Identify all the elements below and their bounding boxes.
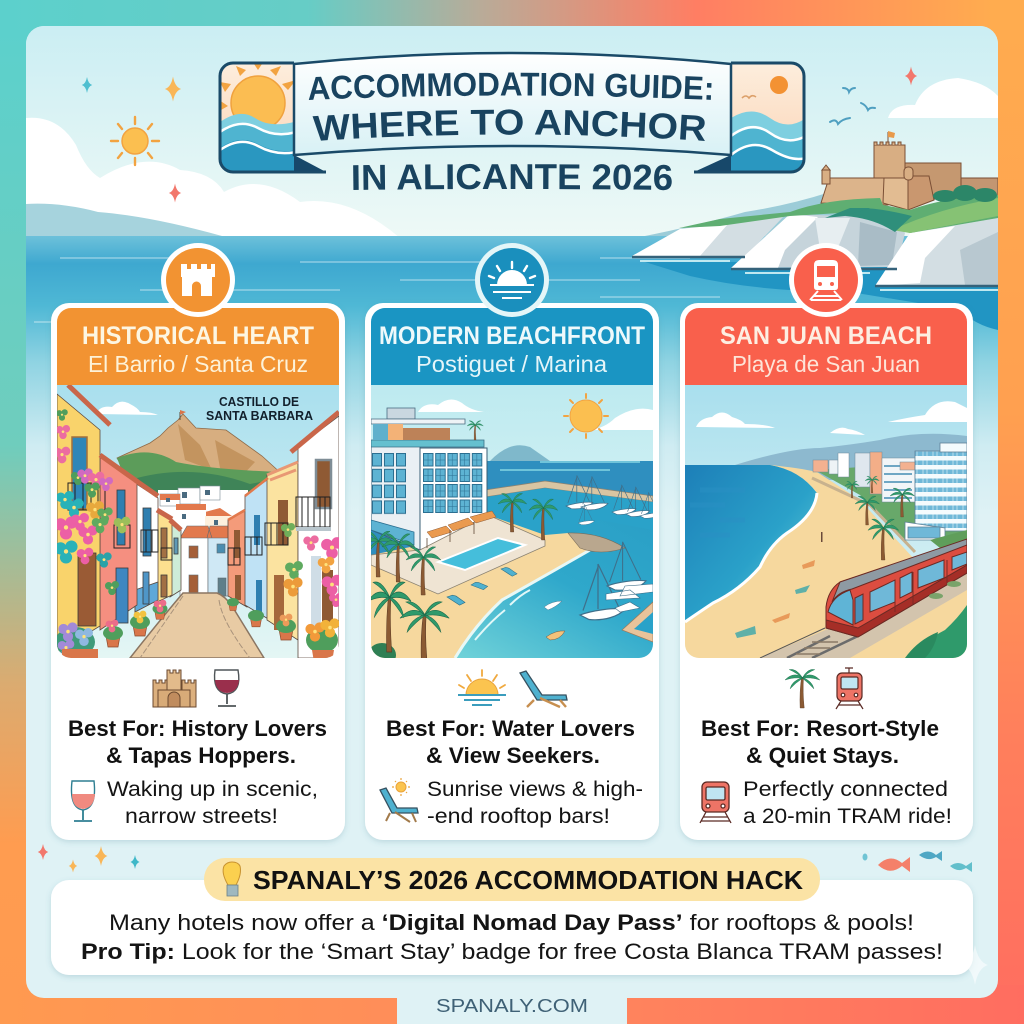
card 1 header: HISTORICAL HEART xyxy=(82,322,314,350)
card 1 illustration: old town street xyxy=(54,385,343,662)
hack text: Pro Tip: Look for the ‘Smart Stay’ badge for free Costa Blanca TRAM passes! xyxy=(81,939,943,964)
card 3 header: Playa de San Juan xyxy=(732,351,920,377)
title banner xyxy=(218,52,806,190)
card 3 header xyxy=(685,308,967,385)
banner right flap xyxy=(694,62,806,175)
moored boats back xyxy=(566,475,593,509)
card 1 body xyxy=(68,670,327,828)
towels xyxy=(772,560,815,623)
footer tab: SPANALY.COM xyxy=(436,996,588,1016)
hack heading pill xyxy=(204,858,820,901)
panel: historical heart card xyxy=(51,243,345,840)
clouds left xyxy=(26,118,400,238)
card 2 header xyxy=(371,308,653,385)
palms xyxy=(371,531,392,578)
panel: san juan beach card xyxy=(680,243,973,840)
card 2 illustration: hotel and marina xyxy=(362,385,661,667)
large hotel xyxy=(905,443,967,540)
right houses xyxy=(228,416,339,658)
icon badge: sunrise xyxy=(475,243,549,317)
best for text: Best For: Water Lovers xyxy=(386,716,635,741)
water and beach xyxy=(456,560,653,658)
icon: tram xyxy=(836,668,863,709)
tip text: a 20-min TRAM ride! xyxy=(743,805,952,828)
beach xyxy=(685,465,967,658)
terrace and pool xyxy=(371,515,545,594)
rock B xyxy=(731,214,905,268)
end-of-street houses xyxy=(180,526,229,596)
castle label: SANTA BARBARA xyxy=(206,409,313,423)
footer tab xyxy=(397,996,627,1024)
hack text: Many hotels now offer a ‘Digital Nomad Day Pass’ for rooftops & pools! xyxy=(109,910,914,935)
birds xyxy=(830,88,875,124)
card 1 header: El Barrio / Santa Cruz xyxy=(88,351,308,377)
hotel xyxy=(371,408,487,550)
tip text xyxy=(743,778,952,828)
foliage xyxy=(913,605,967,658)
best for text xyxy=(386,716,635,768)
tram xyxy=(826,539,967,637)
left doors, windows and balconies xyxy=(68,437,178,626)
hills xyxy=(735,434,967,480)
card 3 body xyxy=(700,668,952,828)
road xyxy=(130,593,264,658)
hack heading pill: SPANALY’S 2026 ACCOMMODATION HACK xyxy=(253,865,803,895)
beach loungers xyxy=(447,595,465,605)
cliffs with castle xyxy=(632,131,998,290)
right windows and balconies xyxy=(228,460,333,635)
hack text xyxy=(81,910,943,964)
clouds right xyxy=(888,78,998,118)
fish decoration xyxy=(862,851,972,872)
icon badge: train xyxy=(789,243,863,317)
left houses xyxy=(57,394,181,652)
panel: modern beachfront card xyxy=(362,243,661,840)
card 3 illustration: beach and tram xyxy=(685,385,967,658)
icon: sun lounger xyxy=(520,671,567,707)
icon: small tram xyxy=(700,782,731,823)
best for text: & Tapas Hoppers. xyxy=(106,743,296,768)
tip text: Perfectly connected xyxy=(743,778,948,801)
front sailboats and pier xyxy=(580,564,625,620)
rock A xyxy=(632,216,784,257)
tip text: narrow streets! xyxy=(125,805,278,828)
sun xyxy=(564,394,608,438)
card 2 header: MODERN BEACHFRONT xyxy=(379,322,645,350)
decorative sparkles lower left xyxy=(38,844,140,872)
palms xyxy=(845,481,859,498)
title line 3: IN ALICANTE 2026 xyxy=(353,164,672,190)
tram track xyxy=(760,570,967,658)
distant hills xyxy=(26,192,860,237)
flowers xyxy=(54,409,343,662)
icon: lounger with sun xyxy=(380,778,418,822)
banner left flap xyxy=(219,62,326,175)
castle label xyxy=(206,397,313,420)
icon: sand castle xyxy=(153,670,196,707)
faint sparkle xyxy=(962,945,988,985)
best for text: Best For: Resort-Style xyxy=(701,716,939,741)
best for text: & View Seekers. xyxy=(426,743,600,768)
card 2 header: Postiguet / Marina xyxy=(416,351,607,377)
tip text xyxy=(107,778,318,828)
castle xyxy=(821,131,998,210)
icon: light bulb xyxy=(223,862,240,896)
card 3 header: SAN JUAN BEACH xyxy=(720,322,932,350)
icon badge: castle tower xyxy=(161,243,235,317)
sea xyxy=(685,465,817,622)
title line 2: WHERE TO ANCHOR xyxy=(312,109,705,141)
best for text xyxy=(68,716,327,768)
sparkles and sun, upper left xyxy=(82,66,917,202)
best for text: & Quiet Stays. xyxy=(746,743,899,768)
rock C xyxy=(875,218,998,286)
icon: palm tree xyxy=(785,669,820,708)
castle label: CASTILLO DE xyxy=(219,395,299,409)
panel: accommodation hack xyxy=(51,858,973,975)
background buildings xyxy=(813,452,915,502)
card 2 body xyxy=(380,670,643,828)
mountain xyxy=(116,414,278,472)
tip text: Sunrise views & high- xyxy=(427,778,643,801)
distant town xyxy=(158,486,248,535)
title line 1: ACCOMMODATION GUIDE: xyxy=(308,72,712,100)
grass xyxy=(679,195,998,233)
tip text: -end rooftop bars! xyxy=(427,805,610,828)
tip text: Waking up in scenic, xyxy=(107,778,318,801)
icon: sunrise xyxy=(458,670,506,705)
best for text: Best For: History Lovers xyxy=(68,716,327,741)
best for text xyxy=(701,716,939,768)
icon: wine glass xyxy=(214,670,239,706)
tip text xyxy=(427,778,643,828)
banner ribbon xyxy=(294,53,731,155)
card 1 header xyxy=(57,308,339,385)
sea and breakwater xyxy=(490,445,550,461)
sea xyxy=(26,236,998,480)
icon: rosé glass xyxy=(71,781,95,821)
